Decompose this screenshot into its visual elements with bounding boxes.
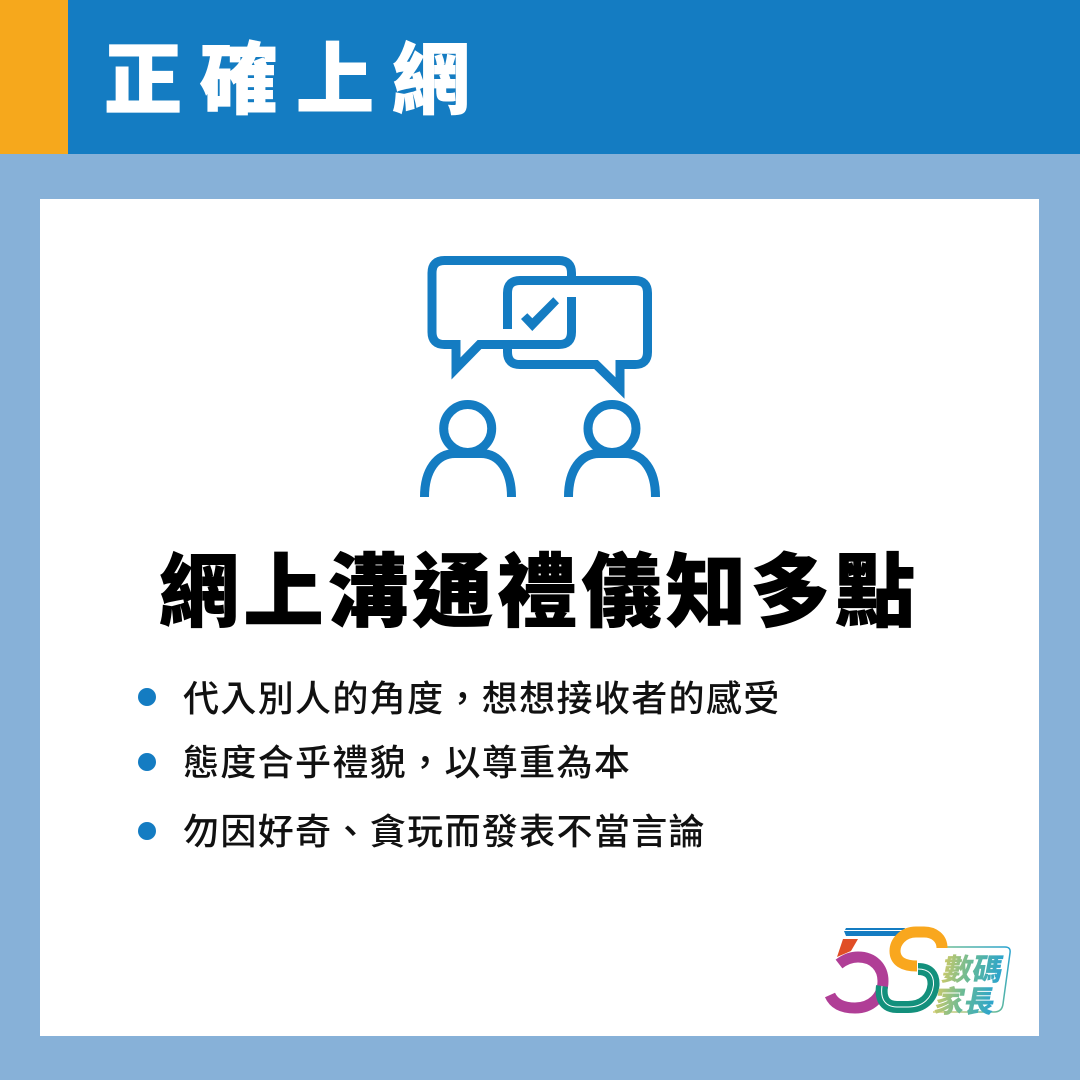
logo stripes: [844, 928, 905, 936]
icon: check mark: [521, 297, 559, 331]
icon: left speech bubble: [432, 260, 572, 368]
bullet list: [138, 678, 781, 852]
icon: right person: [568, 404, 656, 497]
bullet text 3: 勿因好奇、貪玩而發表不當言論: [183, 811, 706, 852]
icon: right speech bubble with tail: [508, 280, 648, 388]
logo text: 數碼: [940, 953, 1006, 987]
bullet marker 1: [138, 688, 156, 706]
logo red wedge: [837, 939, 858, 957]
bullet marker 2: [138, 753, 156, 771]
title: 正確上網: [104, 36, 488, 124]
icon: left person: [424, 404, 512, 497]
white content panel: [40, 199, 1039, 1036]
bullet marker 3: [138, 822, 156, 840]
logo purple 5: [830, 957, 883, 1008]
header bar: [0, 0, 1080, 154]
logo text: 家長: [932, 984, 998, 1019]
logo: 55 parents digital: [825, 926, 1011, 1019]
bullet text 2: 態度合乎禮貌，以尊重為本: [183, 742, 631, 783]
main heading: 網上溝通禮儀知多點: [159, 548, 920, 637]
logo orange curve: [895, 932, 942, 966]
logo green curve: [882, 969, 934, 1007]
bullet text 1: 代入別人的角度，想想接收者的感受: [183, 678, 781, 719]
orange accent block: [0, 0, 68, 154]
logo text: [932, 953, 1006, 1019]
logo frame: [933, 947, 1010, 1012]
